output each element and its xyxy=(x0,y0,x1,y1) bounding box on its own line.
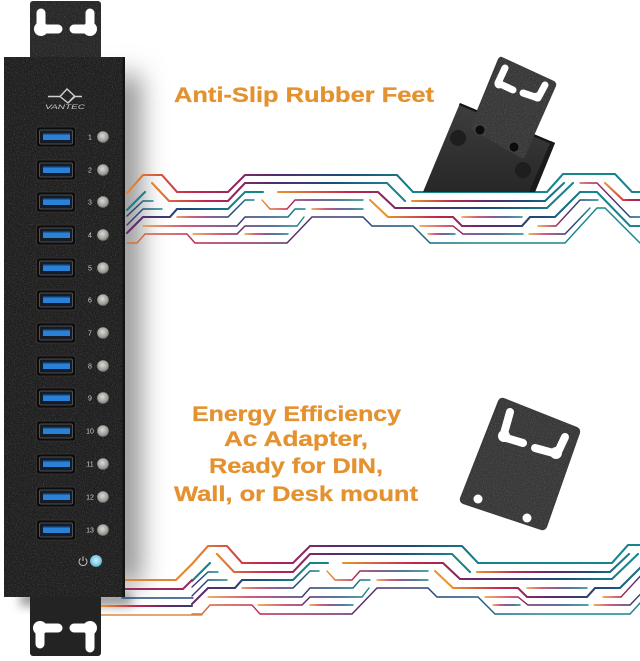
port numbers: 1 xyxy=(88,134,92,142)
text block: energy efficiency description: Energy Efficiency xyxy=(192,403,401,426)
usb ports xyxy=(36,127,76,540)
hub body xyxy=(4,57,125,597)
circuit lines: bottom band xyxy=(100,545,640,615)
port status leds xyxy=(97,131,109,536)
text block: energy efficiency description: Ready for DIN, xyxy=(209,455,383,478)
mounting plate xyxy=(470,57,556,158)
port numbers: 10 xyxy=(86,428,94,436)
heading: anti-slip rubber feet: Anti-Slip Rubber Feet xyxy=(174,84,434,107)
port numbers: 3 xyxy=(88,200,92,206)
port numbers: 11 xyxy=(86,462,94,468)
port numbers: 4 xyxy=(88,232,92,240)
text block: energy efficiency description: Ac Adapter, xyxy=(224,428,368,451)
text block: energy efficiency description xyxy=(174,403,418,506)
port numbers xyxy=(86,134,94,534)
circuit lines: top band xyxy=(127,174,640,243)
port numbers: 13 xyxy=(86,528,94,534)
port numbers: 2 xyxy=(88,168,92,174)
port numbers: 9 xyxy=(88,396,92,402)
power led xyxy=(90,555,102,567)
port numbers: 5 xyxy=(88,266,92,272)
hub bottom mounting bracket xyxy=(30,595,101,656)
vantec logo: VANTEC xyxy=(45,104,85,111)
port numbers: 8 xyxy=(88,364,92,370)
port numbers: 6 xyxy=(88,298,92,304)
hub top mounting bracket xyxy=(30,1,101,59)
port numbers: 12 xyxy=(86,494,94,502)
photo: flat mounting bracket xyxy=(459,397,581,531)
hub drop shadow xyxy=(20,75,140,606)
icon: power symbol xyxy=(79,556,87,566)
rubber feet xyxy=(450,130,531,178)
vantec logo xyxy=(45,89,85,111)
text block: energy efficiency description: Wall, or Desk mount xyxy=(174,483,418,506)
port numbers: 7 xyxy=(88,330,92,338)
photo: hub end with rubber feet and bracket xyxy=(423,57,557,192)
